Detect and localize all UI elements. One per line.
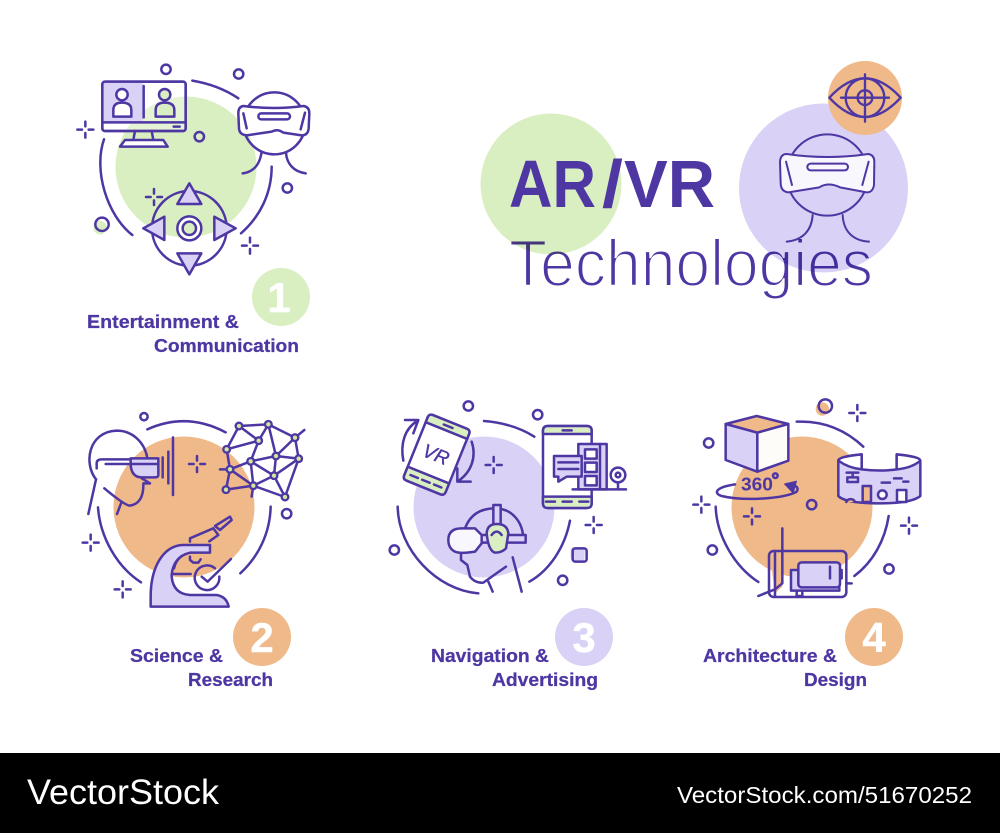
illustration 4 [693,399,920,597]
ring arcs [98,421,271,582]
label: Entertainment & Communication [87,312,299,356]
icon: rotating phone: VR [419,441,452,470]
badge 3 [555,608,613,666]
sparkles [486,457,602,533]
illustration 3 [390,401,626,593]
label: Architecture & Design: Architecture & [703,646,837,666]
icon: curved panorama screen [838,454,920,503]
sparkles [83,456,205,597]
heading: AR/VR: VR [624,147,715,222]
icon: head with headset [238,92,309,173]
panel: science and research [83,413,304,690]
icon: molecular network [220,421,304,500]
badge 2: 2 [250,614,274,661]
ring arcs [398,421,570,593]
green background circle [116,96,256,238]
footer logo text: VectorStock [27,773,220,812]
label: Entertainment & Communication: Entertainment & [87,312,239,332]
panel: navigation and advertising [390,401,626,690]
badge 4 [845,608,903,666]
icon: advertising phone [543,426,626,508]
icon: 360 rotation [717,473,798,499]
orange background circle [114,436,254,578]
orange background circle [732,436,872,578]
purple background circle [414,436,554,578]
label: Entertainment & Communication: Communication [154,336,299,356]
ring arcs [716,422,889,582]
icon: eye target [829,74,901,122]
label: Architecture & Design: Design [804,670,867,690]
heading: Technologies: Technologies [509,226,873,300]
label: Science & Research: Science & [130,646,223,666]
icon: researcher with headset [88,431,173,514]
panel: title [480,61,908,300]
heading: AR/VR [509,147,715,222]
label: Navigation & Advertising [431,646,598,690]
small circles [140,413,291,518]
icon: directional controller [143,183,236,274]
small circles [704,399,894,574]
sparkles [693,405,917,534]
footer url text: VectorStock.com/51670252 [677,782,972,808]
heading: AR/VR: AR [509,147,596,222]
illustration 2 [83,413,304,607]
ring arcs [100,81,272,235]
panel: architecture and design [693,399,920,690]
label: Science & Research [130,646,273,690]
icon: head with AR headset [448,505,526,592]
sparkles [77,122,258,254]
icon: tablet room view [758,528,852,597]
badge 4: 4 [862,614,886,661]
illustration 1 [77,65,309,274]
icon: microscope [151,517,232,607]
label: Science & Research: Research [188,670,273,690]
badge 1: 1 [267,274,291,321]
label: Navigation & Advertising: Navigation & [431,646,549,666]
badge 2 [233,608,291,666]
small circles [390,401,587,585]
footer bar [0,753,1000,833]
icon: cube [726,416,788,472]
icon: rotating phone [402,414,474,496]
label: Architecture & Design [703,646,867,690]
badge 3: 3 [572,614,596,661]
heading: AR/VR: / [602,147,623,222]
label: Navigation & Advertising: Advertising [492,670,598,690]
small circles [93,65,292,234]
icon: monitor video call [102,82,186,147]
title background circles [480,61,908,272]
badge 1 [252,268,310,326]
icon: 360 rotation: 360 [741,474,773,495]
icon: VR headset head [780,134,874,242]
panel: entertainment and communication [77,65,310,356]
